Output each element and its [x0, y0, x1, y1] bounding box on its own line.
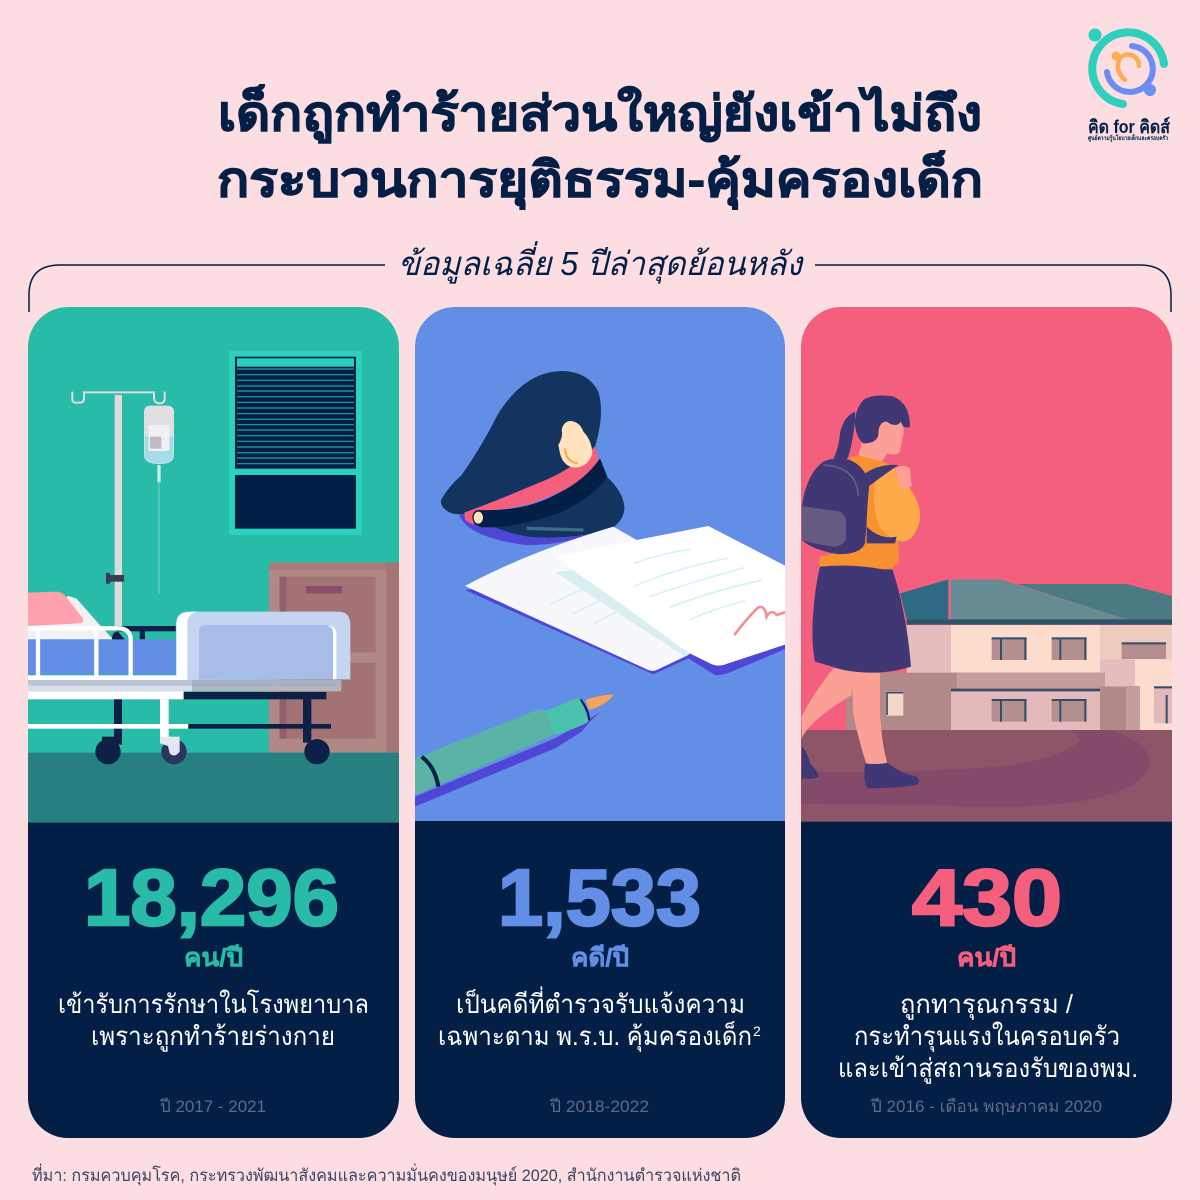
- fountain pen: [415, 694, 614, 807]
- panel: shelter: [800, 307, 1175, 1138]
- stat panel: hospital: เพราะถูกทำร้ายร่างกาย: [91, 1021, 335, 1052]
- houses: [846, 579, 1175, 730]
- title: เด็กถูกทำร้ายส่วนใหญ่ยังเข้าไม่ถึง: [218, 84, 982, 144]
- stat panel: hospital: คน/ปี: [184, 944, 243, 972]
- stat panel: shelter: ถูกทารุณกรรม /: [900, 989, 1074, 1020]
- illustration: hospital room: [28, 351, 400, 823]
- stat panel: police: เฉพาะตาม พ.ร.บ. คุ้มครองเด็ก: [438, 1020, 752, 1052]
- stat panel: police: ปี 2018-2022: [549, 1097, 649, 1116]
- stat panel: police: [438, 853, 761, 1116]
- subtitle with bracket: [29, 241, 1171, 312]
- illustration: police cap, documents and pen: [415, 371, 787, 807]
- subtitle with bracket: ข้อมูลเฉลี่ย 5 ปีล่าสุดย้อนหลัง: [398, 241, 805, 284]
- stat panel: police: เป็นคดีที่ตำรวจรับแจ้งความ: [456, 986, 745, 1019]
- panel: police: [415, 307, 787, 1138]
- stat panel: police: 1,533: [498, 853, 701, 942]
- title: [217, 84, 983, 210]
- stat panel: shelter: [838, 853, 1138, 1116]
- logo: [1088, 28, 1171, 143]
- documents: [465, 526, 787, 675]
- stat panel: shelter: 430: [912, 853, 1062, 942]
- stat panel: hospital: [58, 853, 369, 1116]
- stat panel: hospital: 18,296: [84, 853, 339, 942]
- illustration: girl with backpack and houses: [800, 396, 1175, 822]
- stat panel: hospital: เข้ารับการรักษาในโรงพยาบาล: [58, 989, 369, 1019]
- police cap: [441, 371, 624, 545]
- logo: ศูนย์ความรู้นโยบายเด็กและครอบครัว: [1088, 133, 1169, 143]
- iv stand: [72, 392, 174, 628]
- ground: [800, 730, 1175, 822]
- window: [229, 351, 362, 535]
- floor: [28, 753, 400, 823]
- stat panel: shelter: กระทำรุนแรงในครอบครัว: [854, 1021, 1120, 1052]
- girl: [802, 396, 920, 788]
- title: กระบวนการยุติธรรม-คุ้มครองเด็ก: [217, 150, 983, 210]
- stat panel: hospital: ปี 2017 - 2021: [159, 1097, 266, 1116]
- hospital bed: [28, 592, 350, 764]
- panel: hospital: [28, 307, 400, 1138]
- stat panel: police: 2: [753, 1023, 761, 1039]
- cabinet: [269, 563, 400, 753]
- stat panel: shelter: คน/ปี: [957, 944, 1016, 972]
- source footnote: ที่มา: กรมควบคุมโรค, กระทรวงพัฒนาสังคมและความมั่นคงของมนุษย์ 2020, สำนักงานตำรวจแห่งชาติ: [32, 1163, 741, 1186]
- stat panel: shelter: และเข้าสู่สถานรองรับของพม.: [838, 1053, 1138, 1084]
- stat panel: shelter: ปี 2016 - เดือน พฤษภาคม 2020: [870, 1097, 1102, 1116]
- stat panel: police: คดี/ปี: [571, 944, 629, 972]
- logo: คิด for คิดส์: [1088, 116, 1171, 137]
